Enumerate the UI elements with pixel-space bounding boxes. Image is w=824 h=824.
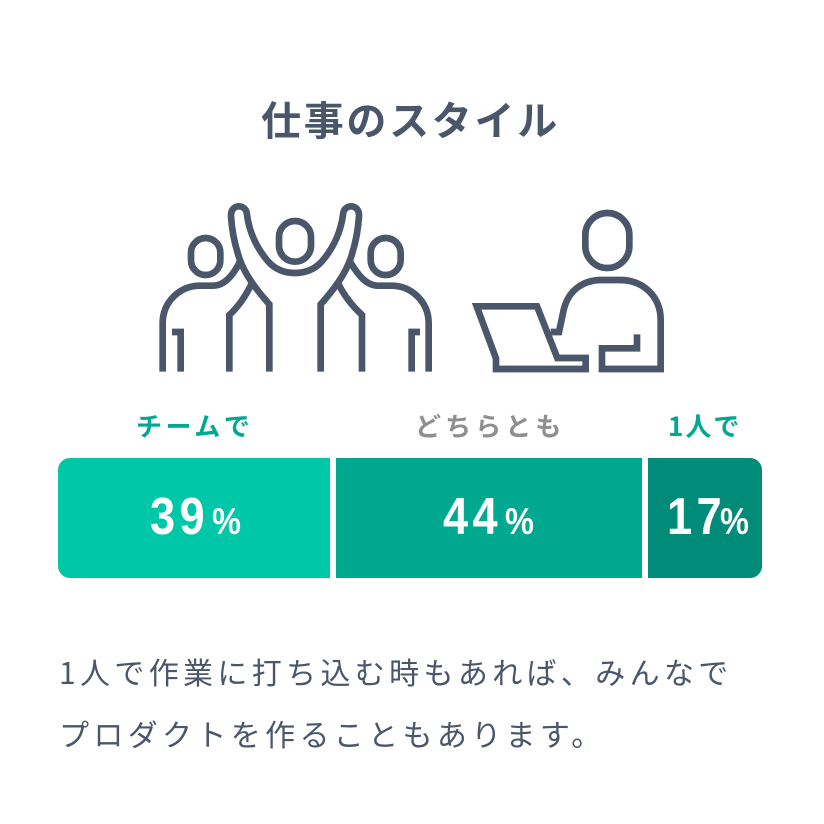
bar segment: team 39%: 39 (150, 488, 209, 546)
bar segment: solo 17% (648, 458, 762, 578)
title: 仕事のスタイル (261, 89, 560, 147)
body text: 1人で作業に打ち込む時もあれば、みんなで (59, 649, 733, 693)
label: team: チームで (136, 407, 253, 444)
bar segment: team 39%: % (212, 501, 241, 542)
bar segment: either 44% (336, 458, 642, 578)
bar segment: either 44%: 44 (443, 488, 502, 546)
bar segment: solo 17%: 17 (667, 488, 726, 546)
label: either: どちらとも (415, 407, 566, 444)
body text (59, 649, 733, 755)
icon: team of three people raising hands (159, 203, 432, 372)
body text: プロダクトを作ることもあります。 (59, 711, 606, 755)
bar segment: solo 17%: % (720, 501, 749, 542)
bar segment: team 39% (58, 458, 330, 578)
bar segment: either 44%: % (505, 501, 534, 542)
icon: person working at a laptop (472, 210, 664, 372)
label: solo: 1人で (668, 407, 741, 444)
